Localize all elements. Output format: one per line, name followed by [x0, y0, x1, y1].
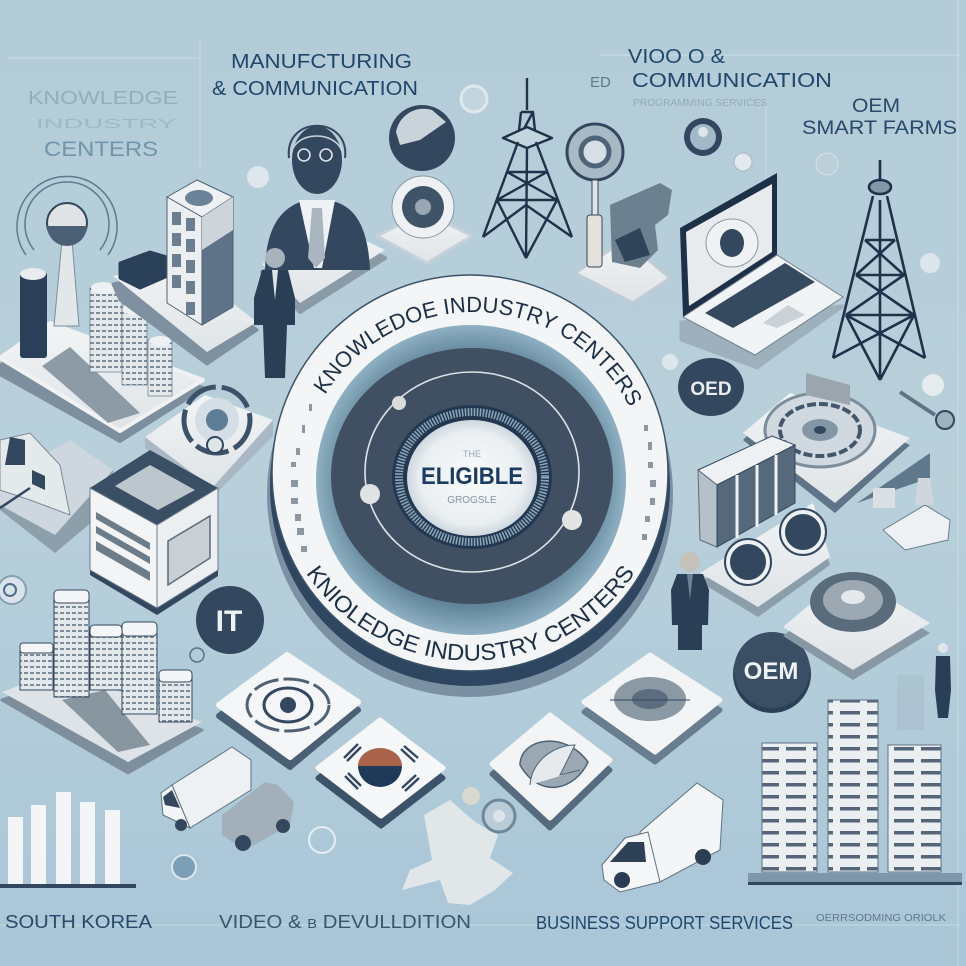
heading: OEM smart farms: OEM [852, 96, 900, 117]
illustration: businessman bust [262, 126, 385, 312]
label: South Korea: SOUTH KOREA [5, 912, 152, 932]
label: video and development: VIDEO & B DEVULLDITION [219, 912, 471, 932]
inner white seal [407, 420, 537, 536]
illustration: bar chart [0, 792, 136, 888]
illustration: lower-left city [0, 576, 202, 773]
heading: video and communication: PROGRAMMING SERVICES [633, 98, 767, 109]
ring tick marks [291, 404, 656, 552]
icon: communication tower right [833, 160, 925, 380]
dark disc [331, 348, 613, 604]
heading: OEM smart farms: SMART FARMS [802, 118, 957, 139]
nodes [360, 484, 380, 504]
heading: faded knowledge industry centers: KNOWLEDGE [28, 88, 178, 108]
illustration: standing man left [254, 248, 295, 378]
textured towers [90, 288, 172, 396]
heading: video and communication [590, 46, 832, 109]
heading: video and communication: COMMUNICATION [632, 70, 832, 92]
central emblem [267, 274, 673, 697]
badge: IT [196, 586, 264, 654]
illustration: lower-right skyscrapers [748, 643, 962, 885]
dark cylinder [20, 272, 47, 358]
heading: video and communication: VIOO O & [628, 46, 726, 68]
badge: OEM: OEM [744, 658, 798, 685]
panel: lens tile [219, 655, 358, 767]
heading: faded knowledge industry centers: INDUSTRY [36, 116, 177, 131]
illustration: jigsaw map [172, 648, 515, 905]
badge: OEM [733, 632, 811, 713]
badge: OED: OED [690, 379, 732, 400]
illustration: left cube building [90, 450, 218, 615]
icon: observation tower [17, 176, 117, 326]
badge: IT: IT [216, 605, 242, 638]
panel: Korean flag tile [318, 720, 443, 826]
illustration: delivery truck left [161, 747, 294, 851]
label: business support services: BUSINESS SUPPORT SERVICES [536, 913, 793, 933]
illustration: right servers platform [698, 436, 830, 617]
heading: manufacturing and communication: & COMMUNICATION [212, 78, 418, 100]
heading: video and communication: ED [590, 74, 611, 91]
curved label: bottom: KNIOLEDGE INDUSTRY CENTERS [307, 565, 633, 661]
small figure [935, 643, 951, 718]
panel: gear tile [584, 655, 720, 762]
illustration: standing man right [671, 552, 709, 650]
illustration: laptop [680, 173, 843, 368]
illustration: white van [602, 783, 723, 892]
icon: communication tower centre [483, 78, 572, 258]
heading: faded knowledge industry centers: CENTERS [44, 138, 158, 161]
central emblem: THE [463, 449, 481, 459]
illustration: left machine [0, 433, 113, 553]
heading: OEM smart farms [802, 96, 957, 139]
heading: faded knowledge industry centers [28, 88, 178, 161]
outer white ring [272, 275, 668, 671]
hatched seal ring [392, 405, 552, 549]
icon: dark globe and lens [247, 86, 487, 263]
heading: manufacturing and communication [212, 51, 418, 100]
central emblem: GROGSLE [447, 495, 497, 506]
label: eligible: ELIGIBLE [421, 463, 523, 490]
curved label: top: KNOWLEDOE INDUSTRY CENTERS [313, 296, 641, 406]
panel: right machine tile [783, 572, 930, 680]
illustration: left circular dial platform [145, 387, 273, 498]
label: faded small text: OERRSODMING ORIOLK [816, 913, 946, 924]
illustration: right dial platform [743, 373, 910, 513]
heading: manufacturing and communication: MANUFCTURING [231, 51, 412, 73]
illustration: skyscraper with platform [113, 180, 257, 364]
panel: curved device tile [492, 715, 610, 828]
badge: OED [678, 358, 744, 416]
icon: satellite and equipment [567, 118, 838, 303]
illustration: top-left city block [0, 176, 203, 441]
illustration: far-right devices [662, 253, 954, 550]
